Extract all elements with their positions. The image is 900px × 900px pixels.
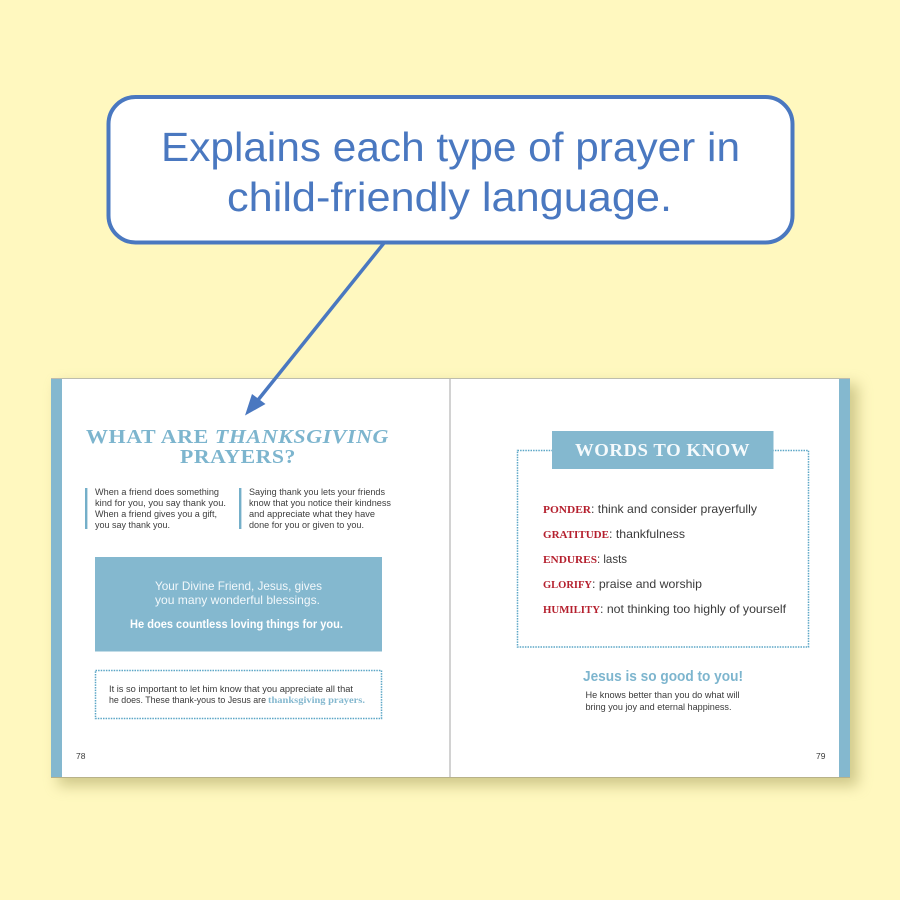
definition: ponder: PONDER: [543, 505, 592, 516]
text column: friend says thank you: you say thank you.: [95, 520, 170, 531]
heading: what are thanksgiving prayers: PRAYERS?: [180, 447, 296, 468]
page number 79: 79: [816, 751, 826, 761]
heading: what are thanksgiving prayers: WHAT ARE THANKSGIVING: [86, 427, 389, 448]
text column: friend says thank you: kind for you, you say thank you.: [95, 498, 226, 509]
panel: blessings callout: Your Divine Friend, Jesus, gives: [155, 579, 322, 593]
left page edge band: [51, 378, 62, 778]
panel: dotted thanksgiving prayers note: [96, 670, 382, 718]
heading: what are thanksgiving prayers: [86, 427, 389, 468]
panel: blessings callout: He does countless loving things for you.: [130, 617, 343, 631]
header: words to know: [552, 431, 774, 469]
header: words to know: WORDS TO KNOW: [575, 440, 750, 460]
definition: glorify: : praise and worship: [592, 578, 702, 591]
text column: friend says thank you: When a friend does something: [95, 487, 219, 498]
text column: noticing kindness: [239, 487, 391, 531]
panel: blessings callout: you many wonderful blessings.: [155, 593, 320, 607]
definition: glorify: GLORIFY: [543, 580, 592, 591]
text column: noticing kindness: and appreciate what they have: [249, 509, 375, 520]
right page: [451, 378, 850, 778]
spine and page edges: [51, 378, 850, 778]
definition: endures: : lasts: [597, 553, 627, 566]
book spread: [51, 378, 850, 778]
text column: friend says thank you: [85, 487, 226, 531]
callout text: Explains each type of prayer in: [161, 124, 740, 170]
book shadow: [58, 384, 858, 786]
panel: dotted thanksgiving prayers note: he does. These thank-yous to Jesus are: [109, 694, 266, 705]
text block: joy and eternal happiness: bring you joy and eternal happiness.: [586, 701, 732, 712]
panel: words to know: [518, 431, 808, 647]
text column: noticing kindness: Saying thank you lets your friends: [249, 487, 385, 498]
callout text: child-friendly language.: [227, 174, 672, 220]
text block: joy and eternal happiness: He knows better than you do what will: [586, 689, 740, 700]
definition: humility: : not thinking too highly of yourself: [600, 603, 787, 616]
subheading: jesus is so good to you: Jesus is so good to you!: [583, 669, 743, 685]
definition: humility: HUMILITY: [543, 605, 601, 616]
arrow from callout to heading: [245, 243, 384, 416]
definition: glorify: [543, 578, 702, 591]
definition: gratitude: : thankfulness: [609, 528, 685, 541]
definition: gratitude: [543, 528, 685, 541]
panel: blessings callout: [95, 557, 382, 652]
definition: gratitude: GRATITUDE: [543, 530, 609, 541]
callout text: [161, 124, 740, 220]
text column: noticing kindness: know that you notice their kindness: [249, 498, 391, 509]
panel: dotted thanksgiving prayers note: thanksgiving prayers.: [268, 695, 366, 706]
text column: noticing kindness: done for you or given to you.: [249, 520, 364, 531]
left page: [51, 378, 451, 778]
text block: joy and eternal happiness: [586, 689, 740, 712]
right page edge band: [839, 378, 850, 778]
text column: friend says thank you: When a friend gives you a gift,: [95, 509, 217, 520]
callout bubble: [108, 97, 792, 242]
definition: endures: ENDURES: [543, 555, 597, 566]
panel: dotted thanksgiving prayers note: It is so important to let him know that you appreciate all that: [109, 683, 353, 694]
page number 78: 78: [76, 751, 86, 761]
definition: ponder: : think and consider prayerfully: [591, 503, 757, 516]
definition: endures: [543, 553, 627, 566]
